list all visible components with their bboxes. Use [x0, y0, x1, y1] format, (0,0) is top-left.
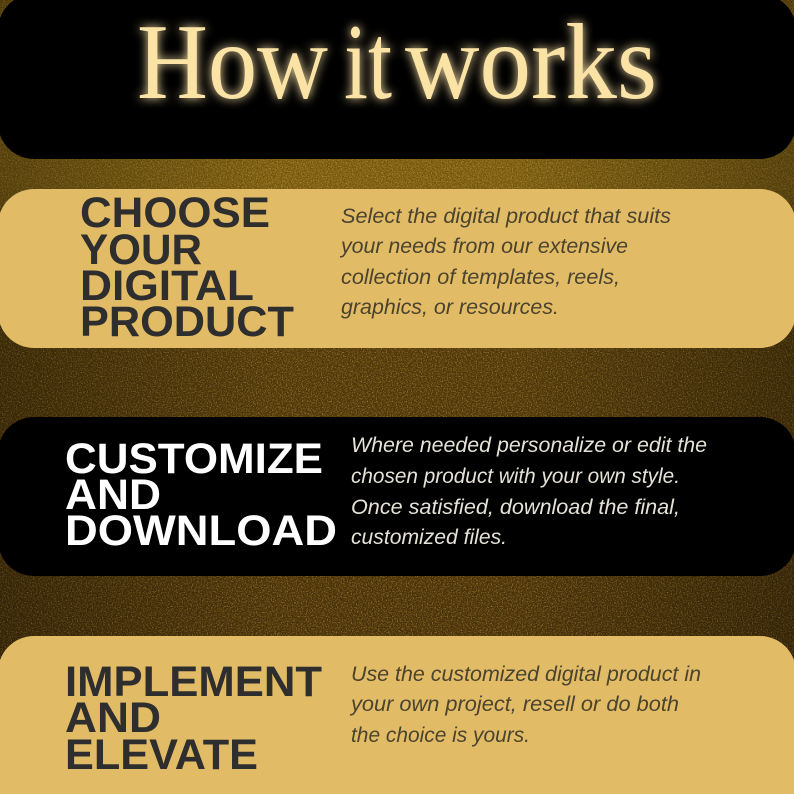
- step 1 heading: [80, 189, 294, 346]
- step 2 description: customized files.: [351, 526, 507, 549]
- step 3 heading: ELEVATE: [65, 731, 258, 779]
- step 3 heading: [65, 658, 322, 779]
- step 1 description: Select the digital product that suits: [341, 205, 672, 228]
- title: works: [405, 3, 657, 122]
- step 3 description: the choice is yours.: [351, 724, 530, 747]
- step 1 heading: CHOOSE: [80, 189, 270, 237]
- step 3 heading: AND: [65, 694, 161, 742]
- panel: step 1: [0, 189, 794, 348]
- step 2 heading: AND: [65, 471, 161, 519]
- step 1 description: collection of templates, reels,: [341, 266, 620, 289]
- step 2 description: chosen product with your own style.: [351, 465, 680, 488]
- title: it: [344, 3, 392, 122]
- step 2 heading: [65, 435, 337, 555]
- step 1 description: graphics, or resources.: [341, 296, 559, 319]
- step 3 description: Use the customized digital product in: [351, 663, 701, 686]
- panel: title banner: [0, 0, 794, 159]
- step 2 description: Where needed personalize or edit the: [351, 434, 707, 457]
- step 1 heading: YOUR: [80, 226, 202, 274]
- step 3 description: [349, 663, 701, 747]
- step 1 description: [339, 205, 672, 319]
- step 2 heading: DOWNLOAD: [65, 507, 337, 555]
- step 1 heading: DIGITAL: [80, 262, 254, 310]
- step 1 description: your needs from our extensive: [339, 235, 628, 258]
- title: [137, 3, 657, 122]
- panel: step 2: [0, 417, 794, 576]
- step 2 description: Once satisfied, download the final,: [351, 496, 680, 519]
- title: How: [137, 3, 328, 122]
- step 2 description: [351, 434, 707, 549]
- step 2 heading: CUSTOMIZE: [65, 435, 323, 483]
- step 3 heading: IMPLEMENT: [65, 658, 322, 706]
- step 1 heading: PRODUCT: [80, 298, 294, 346]
- step 3 description: your own project, resell or do both: [349, 693, 679, 716]
- panel: step 3: [0, 636, 794, 794]
